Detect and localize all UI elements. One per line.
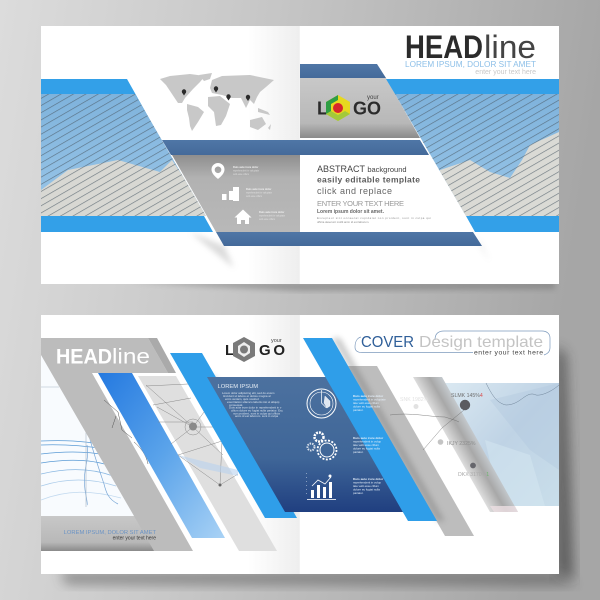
blue gradient strip bbox=[98, 373, 225, 538]
headline: HEAD bbox=[56, 346, 112, 368]
dark blue band: top right page bbox=[300, 64, 386, 78]
text block: abstract bbox=[317, 164, 431, 224]
text: lorem paragraph: exercitation ullamco laboris nisi ut aliquip bbox=[227, 400, 280, 404]
logo bbox=[317, 95, 381, 121]
text: lorem paragraph: tincidunt ut labore et dolore magna al bbox=[223, 394, 271, 398]
right photo with hatching bbox=[390, 94, 560, 216]
captions on strip bbox=[353, 394, 386, 495]
caption 2: reprehenderit in volup bbox=[353, 440, 381, 444]
caption 1: reprehenderit in voluptate bbox=[353, 398, 386, 402]
icon: location pin bbox=[212, 163, 224, 179]
icons: map pins bbox=[182, 86, 250, 101]
headline: line bbox=[112, 346, 150, 368]
caption 2 bbox=[353, 436, 384, 454]
icon: house bbox=[234, 210, 252, 224]
headline: HEAD bbox=[405, 29, 483, 65]
headline bbox=[56, 346, 150, 368]
caption 1: tate velit esse cillum bbox=[353, 401, 379, 405]
icon: bar chart bbox=[222, 187, 239, 201]
text block: abstract: ABSTRACT background bbox=[317, 164, 407, 174]
cover heading: Design template bbox=[419, 334, 543, 351]
text: lorem paragraph: Duis aute irure dolor in reprehenderit in v bbox=[229, 406, 282, 410]
text: lorem paragraph: cillum dolore eu fugiat nulla pariatur. Exc bbox=[231, 408, 283, 412]
gradient strip bbox=[413, 377, 518, 512]
world map bbox=[160, 73, 274, 131]
text: lorem heading: LOREM IPSUM bbox=[218, 384, 258, 390]
subheading bbox=[64, 530, 156, 542]
gray diagonal shape with headline bbox=[41, 338, 193, 551]
text: pin caption: velit esse cillum bbox=[233, 173, 249, 176]
left blue band shape bbox=[41, 79, 213, 232]
network stats chart: IKJY 2325% bbox=[447, 441, 476, 447]
dark blue band: upper left page bbox=[162, 140, 300, 155]
text: lorem paragraph bbox=[222, 391, 283, 418]
cover heading: enter your text here bbox=[474, 350, 543, 356]
gray logo panel bbox=[300, 78, 420, 138]
left photo with hatching bbox=[41, 94, 211, 216]
caption 2: tate velit esse cillum bbox=[353, 443, 379, 447]
text: lorem paragraph: consequat. bbox=[229, 403, 243, 407]
headline: enter your text here bbox=[475, 69, 536, 76]
logo: L bbox=[317, 98, 328, 118]
fold shadows bbox=[190, 232, 490, 268]
caption 3: tate velit esse cillum bbox=[353, 484, 379, 488]
text: lorem paragraph: non proident, sunt in culpa qui officia bbox=[233, 412, 280, 416]
caption 1: pariatur. bbox=[353, 408, 364, 412]
icon: growth chart bbox=[306, 473, 336, 500]
text: lorem paragraph: enim veniam, quis nostrud bbox=[225, 397, 259, 401]
caption 3: dolore eu fugiat nulla bbox=[353, 488, 380, 492]
caption 2: pariatur. bbox=[353, 450, 364, 454]
page: top spread bbox=[41, 26, 559, 284]
text: chart caption: Duis aute irure dolor bbox=[246, 187, 271, 191]
caption 2: Duis aute irure dolor bbox=[353, 436, 384, 440]
text: pin caption: Duis aute irure dolor bbox=[233, 165, 258, 169]
headline bbox=[405, 29, 537, 76]
dark blue band: middle right page bbox=[300, 140, 429, 155]
caption 3: reprehenderit in volup bbox=[353, 480, 381, 484]
text: lorem paragraph: Lorem dolor adipiscing elit, sed do eiusm bbox=[222, 391, 275, 395]
text: pin caption: reprehenderit in voluptate bbox=[233, 170, 260, 172]
headline: LOREM IPSUM, DOLOR SIT AMET bbox=[405, 59, 537, 69]
caption 3: pariatur. bbox=[353, 491, 364, 495]
text block: abstract: ENTER YOUR TEXT HERE bbox=[317, 199, 404, 208]
gray panel with icons bbox=[172, 155, 300, 232]
text: house caption: velit esse cillum bbox=[259, 218, 275, 221]
logo: bottom: your bbox=[271, 338, 282, 344]
brochure shadows bbox=[60, 282, 575, 585]
text: chart caption: reprehenderit in voluptate bbox=[246, 192, 273, 194]
text block: abstract: officia deserunt mollit anim id est laborum. bbox=[317, 220, 369, 224]
subheading: enter your text here bbox=[113, 536, 156, 542]
text: house caption: Duis aute irure dolor bbox=[259, 210, 284, 214]
network gray strip bbox=[138, 376, 277, 551]
caption 1 bbox=[353, 394, 386, 412]
page: bottom spread bbox=[41, 315, 559, 574]
caption 1: dolore eu fugiat nulla bbox=[353, 404, 380, 408]
text: pin caption bbox=[233, 165, 260, 176]
light gray strip bbox=[348, 366, 474, 536]
headline: line bbox=[484, 29, 536, 65]
spine tint bbox=[290, 315, 300, 377]
bright blue strip right bbox=[303, 338, 437, 521]
right blue band shape bbox=[386, 79, 559, 94]
logo: bottom: GO bbox=[259, 342, 285, 359]
logo: GO bbox=[353, 98, 381, 118]
text: house caption: reprehenderit in voluptate bbox=[259, 214, 286, 218]
caption 3: Duis aute irure dolor bbox=[353, 477, 384, 481]
network stats chart bbox=[390, 393, 489, 478]
network stats chart: SNK 1982% bbox=[400, 397, 429, 403]
caption 1: Duis aute irure dolor bbox=[353, 394, 384, 398]
text block: abstract: click and replace bbox=[317, 186, 392, 196]
panel: bottom brochure bbox=[41, 315, 559, 574]
text block: abstract: Lorem ipsum dolor sit amet. bbox=[317, 209, 385, 215]
line art behind blue strip bbox=[104, 400, 148, 464]
text block: abstract: Excepteur sint occaecat cupidatat non proident, sunt in culpa qui bbox=[317, 216, 431, 220]
cover heading bbox=[355, 331, 550, 356]
dark blue band: lower left page bbox=[216, 232, 300, 246]
network stats chart: SLMK 145%4 bbox=[451, 393, 483, 399]
dark blue band: lower right page bbox=[300, 232, 482, 246]
icon: clock bbox=[307, 389, 336, 418]
shadow on bright blue strip bbox=[207, 377, 295, 512]
icon: gears bbox=[308, 432, 336, 460]
shadow on gray strip bbox=[332, 338, 445, 521]
caption 2: dolore eu fugiat nulla bbox=[353, 446, 380, 450]
logo: your bbox=[367, 95, 379, 101]
text: house caption bbox=[259, 210, 286, 221]
subheading: LOREM IPSUM, DOLOR SIT AMET bbox=[64, 530, 156, 536]
dark blue info panel bbox=[207, 377, 403, 512]
text: chart caption bbox=[246, 187, 273, 198]
text block: abstract: easily editable template bbox=[317, 174, 420, 184]
bright blue strip left bbox=[170, 353, 297, 518]
text: lorem paragraph: anim id est laborum. sunt in culpa bbox=[235, 414, 278, 418]
caption 3 bbox=[353, 477, 384, 495]
cover heading: COVER bbox=[361, 334, 414, 351]
text: chart caption: velit esse cillum bbox=[246, 195, 262, 198]
polygon photo panel bbox=[443, 383, 559, 506]
panel: top brochure bbox=[41, 26, 560, 284]
logo: bottom: L bbox=[225, 342, 234, 359]
network diagram bbox=[146, 384, 238, 485]
line art panel bbox=[41, 386, 122, 507]
logo: bottom bbox=[225, 337, 285, 362]
network stats chart: DKX 3170%1 bbox=[458, 472, 489, 478]
